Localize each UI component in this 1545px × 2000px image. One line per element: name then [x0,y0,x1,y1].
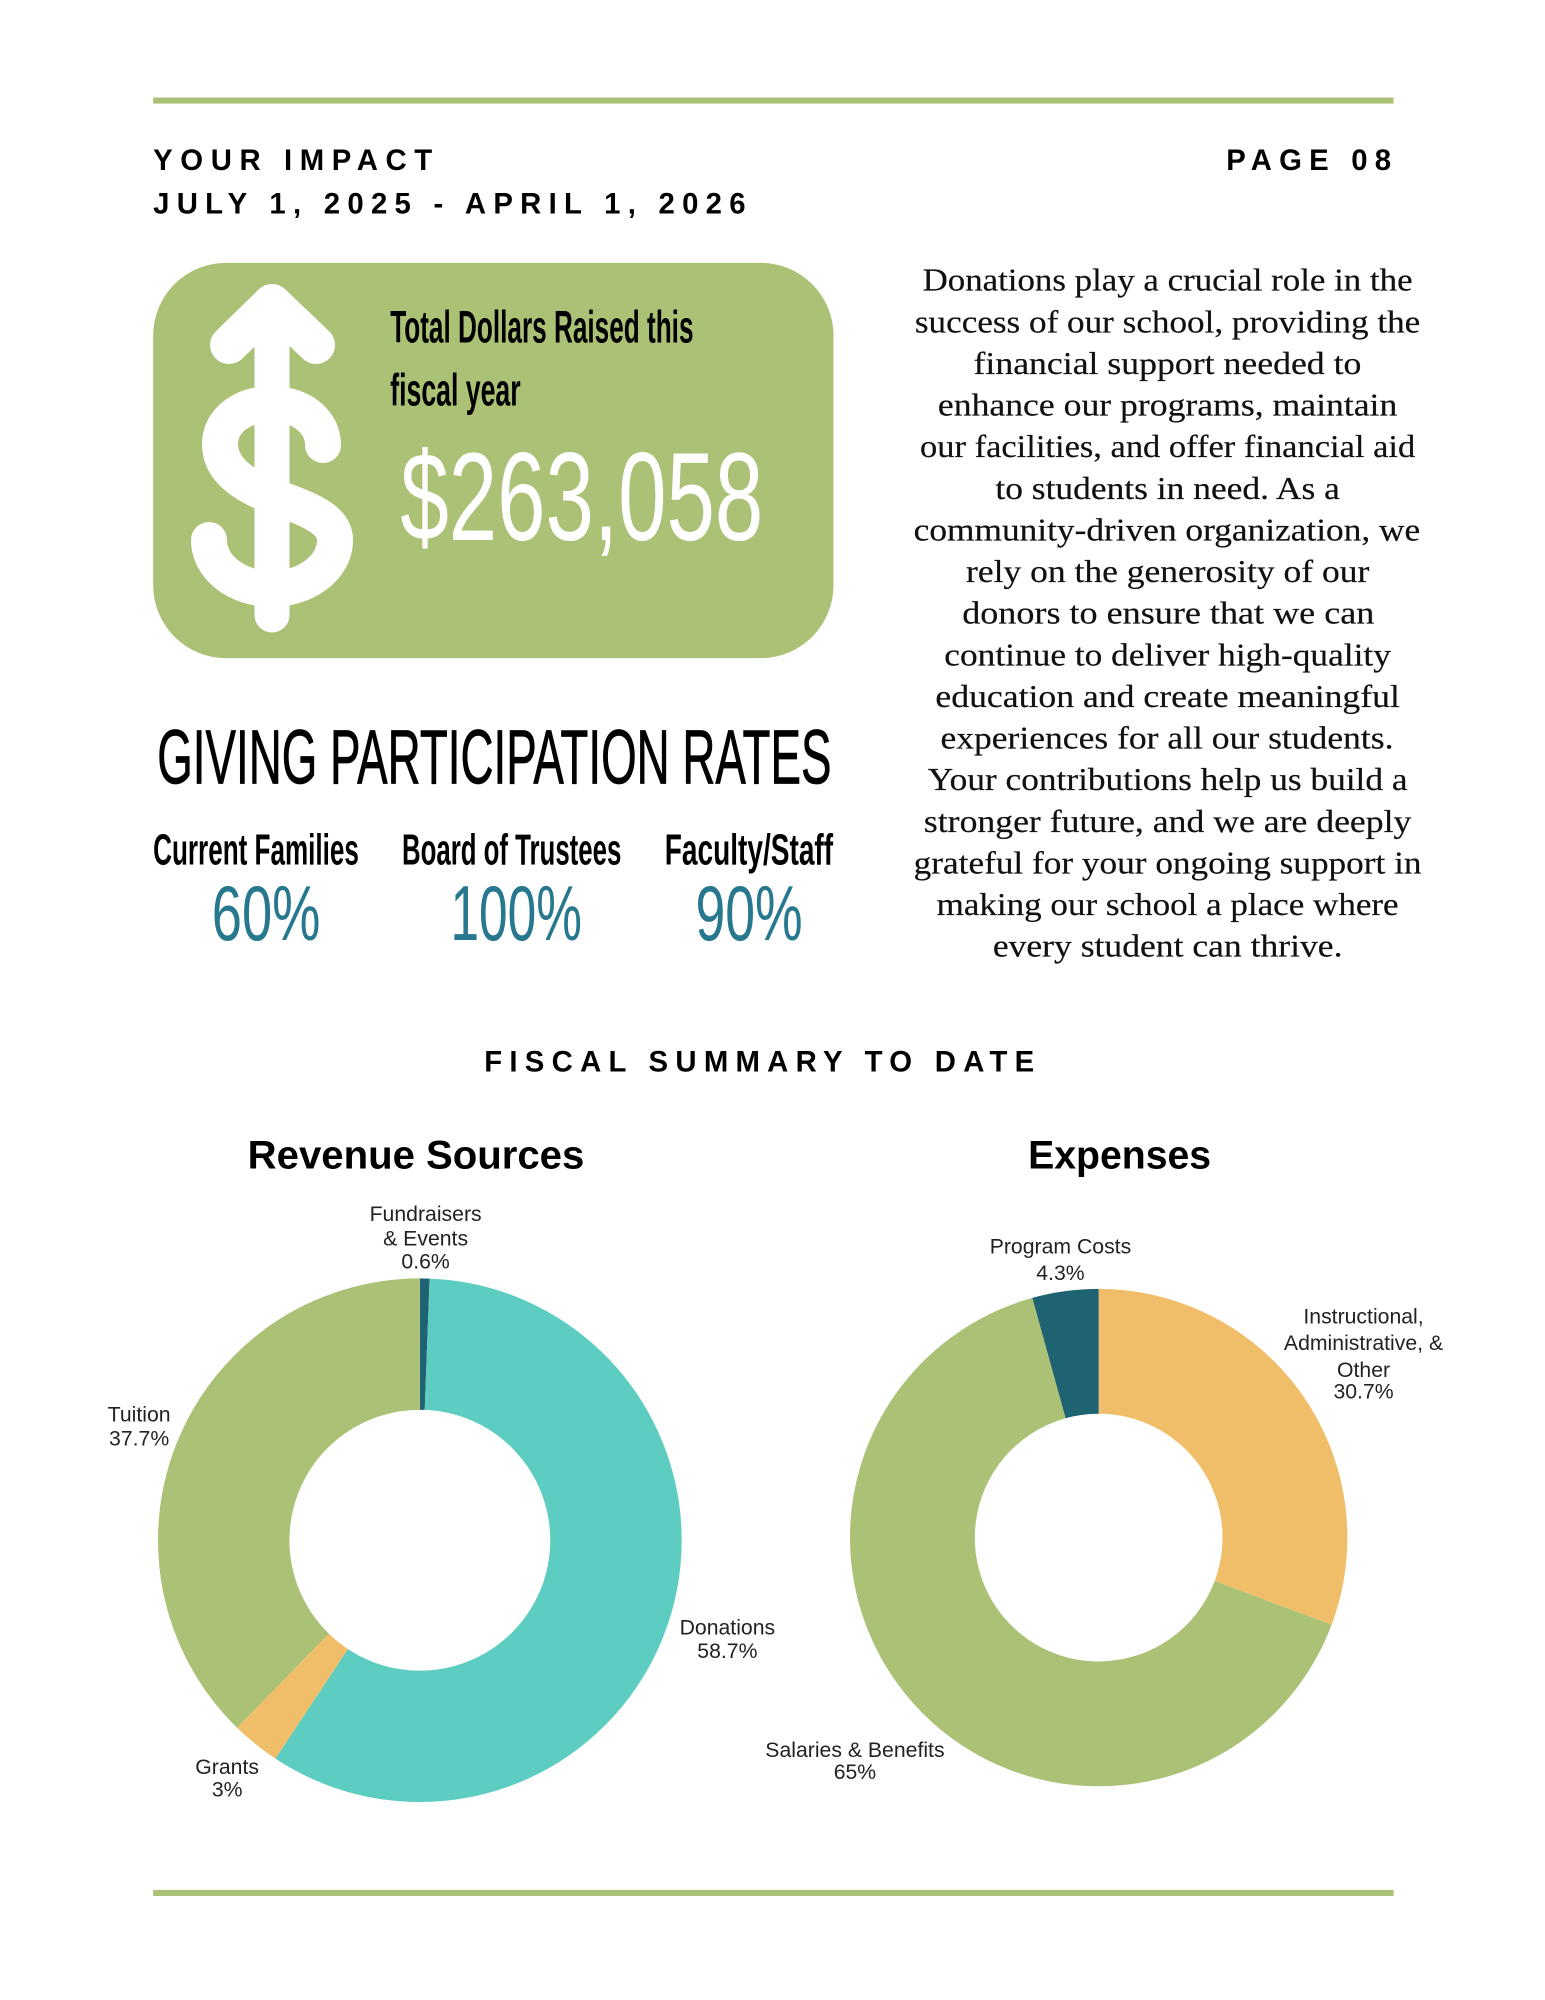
text block: donations paragraph: experiences for all our students. [940,721,1393,756]
text block: donations paragraph: to students in need. As a [995,471,1340,506]
label: instructional, administrative and other: Instructional, [1303,1305,1424,1328]
label: program costs [990,1236,1131,1285]
text block: donations paragraph: making our school a place where [937,887,1399,922]
text block: donations paragraph: Your contributions help us build a [928,762,1408,797]
header: your impact: YOUR IMPACT [153,144,432,177]
text block: donations paragraph: grateful for your ongoing support in [914,845,1422,880]
text block: donations paragraph: education and create meaningful [935,679,1400,714]
donut chart: expenses [912,1351,1285,1724]
text block: donations paragraph: community-driven organization, we [914,512,1420,547]
text block: donations paragraph: stronger future, and we are deeply [924,804,1412,839]
label: instructional, administrative and other: 30.7% [1333,1381,1394,1404]
label: fundraisers and events: & Events [383,1227,468,1250]
label: grants [195,1756,259,1801]
donut chart: revenue sources [224,1344,616,1736]
text block: donations paragraph [914,263,1422,964]
page number: PAGE 08 [1226,144,1391,177]
label: program costs: Program Costs [990,1236,1131,1259]
text block: donations paragraph: rely on the generosity of our [966,554,1370,589]
stat: board of trustees: 100% [450,871,582,957]
label: program costs: 4.3% [1036,1262,1085,1285]
bottom rule [153,1890,1394,1896]
label: tuition [108,1403,171,1451]
panel heading line 2: fiscal year [390,364,521,415]
stat: current families: 60% [212,871,320,957]
label: salaries and benefits [765,1739,945,1784]
text block: donations paragraph: donors to ensure that we can [962,596,1375,631]
stat: current families [153,826,359,957]
label: fundraisers and events: Fundraisers [370,1203,482,1226]
text block: donations paragraph: continue to deliver high-quality [944,637,1391,672]
label: instructional, administrative and other: Other [1337,1359,1390,1382]
total amount: $263,058 [400,427,763,567]
stat: faculty and staff: 90% [696,871,803,957]
stat: faculty and staff [665,826,833,957]
label: tuition: 37.7% [109,1428,169,1451]
stat: faculty and staff: Faculty/Staff [665,826,833,874]
label: donations: Donations [680,1617,775,1640]
stat: board of trustees: Board of Trustees [402,826,621,874]
heading: giving participation rates: GIVING PARTICIPATION RATES [157,714,831,800]
label: instructional, administrative and other: Administrative, & [1284,1332,1443,1355]
panel heading line 1: Total Dollars Raised this [390,302,693,353]
top rule [153,98,1394,104]
label: donations [680,1617,775,1663]
label: grants: Grants [195,1756,259,1779]
label: salaries and benefits: 65% [834,1761,876,1784]
text block: donations paragraph: financial support needed to [974,346,1361,381]
chart title: expenses: Expenses [1028,1134,1211,1178]
text block: donations paragraph: Donations play a crucial role in the [923,263,1413,298]
icon: dollar sign with up arrow [209,303,335,615]
text block: donations paragraph: our facilities, and offer financial aid [920,429,1416,464]
label: grants: 3% [212,1778,243,1801]
text block: donations paragraph: enhance our programs, maintain [938,387,1398,422]
label: fundraisers and events: 0.6% [401,1251,450,1274]
text block: donations paragraph: success of our school, providing the [915,304,1420,339]
section heading: fiscal summary: FISCAL SUMMARY TO DATE [484,1046,1034,1079]
text block: donations paragraph: every student can thrive. [993,929,1343,964]
label: instructional, administrative and other [1284,1305,1443,1404]
panel: total dollars raised [153,263,834,658]
header: date range: JULY 1, 2025 - APRIL 1, 2026 [153,187,746,220]
stat: current families: Current Families [153,826,359,874]
label: salaries and benefits: Salaries & Benefits [765,1739,945,1762]
stat: board of trustees [402,826,621,957]
label: fundraisers and events [370,1203,482,1274]
chart title: revenue sources: Revenue Sources [248,1134,584,1178]
label: donations: 58.7% [697,1640,758,1663]
label: tuition: Tuition [108,1403,171,1426]
